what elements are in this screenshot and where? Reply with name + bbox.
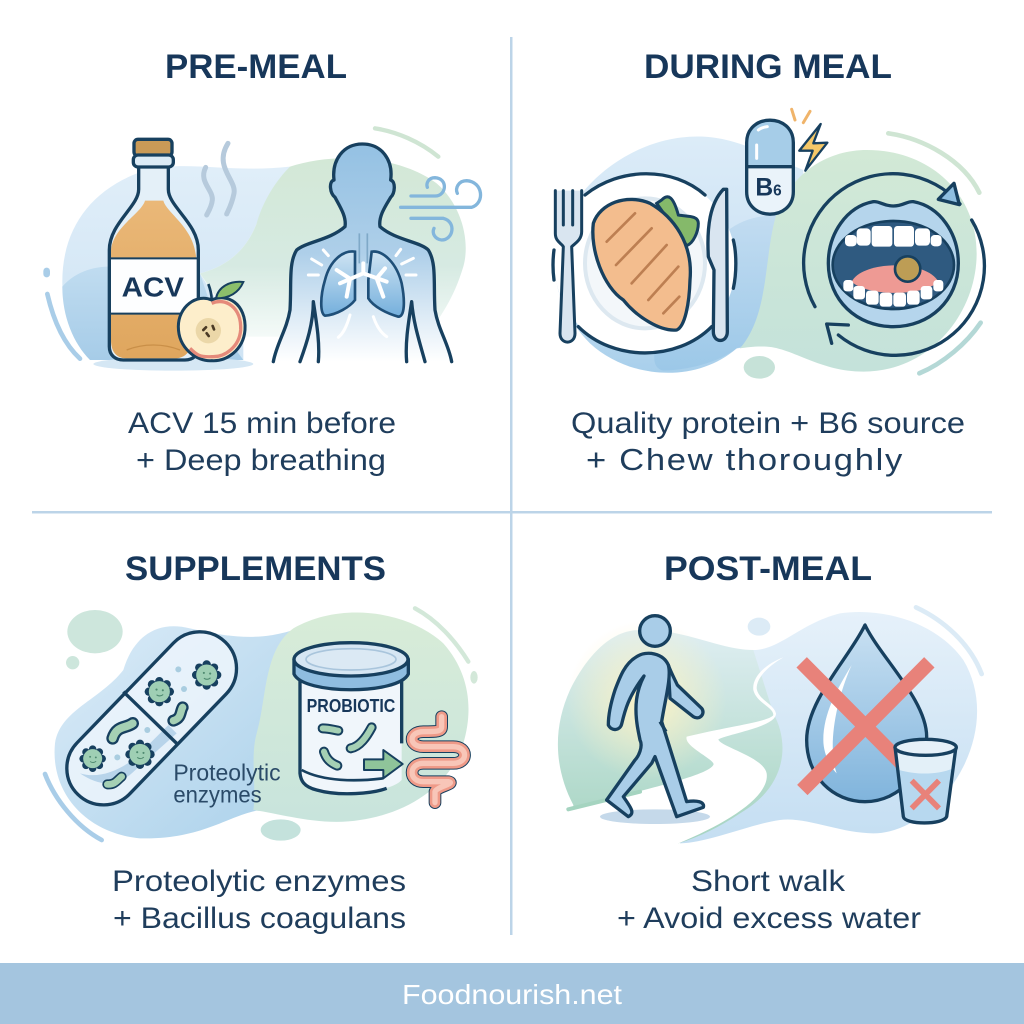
icon: breath wind <box>401 178 481 240</box>
heading: pre-meal: PRE-MEAL <box>165 48 347 86</box>
icon: apple half <box>178 282 245 361</box>
icon: grilled chicken <box>593 197 698 330</box>
capsule label <box>173 760 281 807</box>
icon: intestine <box>412 717 465 803</box>
vertical divider <box>510 37 512 935</box>
icon: water drop <box>807 625 927 802</box>
capsule label: enzymes <box>173 781 262 807</box>
icon: enzyme capsule <box>52 617 252 820</box>
illustration: vinegar and breathing <box>47 128 481 371</box>
decorative shapes <box>888 133 981 373</box>
icon: B6 capsule <box>747 120 793 214</box>
bottle label text: ACV <box>122 272 184 303</box>
icon: human torso with lungs <box>273 144 452 362</box>
icon: fork <box>555 191 582 342</box>
caption: pre-meal: ACV 15 min before <box>128 407 396 440</box>
icon: probiotic jar <box>294 643 408 794</box>
walking path <box>568 657 783 853</box>
upper teeth <box>845 226 942 247</box>
footer band <box>0 963 1024 1024</box>
caption: supplements: + Bacillus coagulans <box>113 902 406 935</box>
panel: post-meal <box>558 550 982 935</box>
icon: energy bolt <box>792 109 827 171</box>
icon: glass with cross <box>895 739 956 823</box>
capsule label: Proteolytic <box>173 760 281 786</box>
illustration: plate, capsule and chewing <box>553 109 984 379</box>
illustration: walking and water limit <box>558 607 982 853</box>
caption: during meal: + Chew thoroughly <box>586 442 904 477</box>
caption: post-meal: Short walk <box>691 865 846 898</box>
icon: knife <box>708 189 727 340</box>
icon: plate <box>553 173 736 354</box>
illustration: capsule and probiotic jar <box>45 608 478 841</box>
icon: vapour <box>204 143 234 215</box>
horizontal divider <box>32 511 992 514</box>
lower teeth <box>843 280 943 307</box>
decorative shapes <box>45 608 478 841</box>
panel: supplements <box>45 550 478 935</box>
caption: supplements: Proteolytic enzymes <box>112 865 406 898</box>
heading: during meal: DURING MEAL <box>644 48 892 86</box>
jar label: PROBIOTIC <box>307 695 395 716</box>
footer text: Foodnourish.net <box>402 979 622 1010</box>
caption: pre-meal <box>128 407 396 477</box>
caption: pre-meal: + Deep breathing <box>136 444 386 477</box>
caption: post-meal <box>617 865 921 935</box>
icon: red cross <box>802 662 930 792</box>
panel: during meal <box>553 48 984 477</box>
shadow <box>93 357 253 371</box>
decorative shapes <box>600 607 982 824</box>
caption: during meal <box>571 407 965 477</box>
icon: walking person <box>607 616 704 817</box>
caption: supplements <box>112 865 406 935</box>
icon: chewing mouth <box>828 202 958 327</box>
heading: post-meal: POST-MEAL <box>664 550 872 588</box>
caption: post-meal: + Avoid excess water <box>617 902 921 935</box>
heading: supplements: SUPPLEMENTS <box>125 550 386 588</box>
icon: chewing cycle arrows <box>804 174 984 355</box>
icon: vinegar bottle <box>109 139 198 360</box>
decorative arcs <box>47 128 438 359</box>
panel: pre-meal <box>47 48 481 477</box>
capsule label: B6 <box>755 174 782 201</box>
caption: during meal: Quality protein + B6 source <box>571 407 965 440</box>
